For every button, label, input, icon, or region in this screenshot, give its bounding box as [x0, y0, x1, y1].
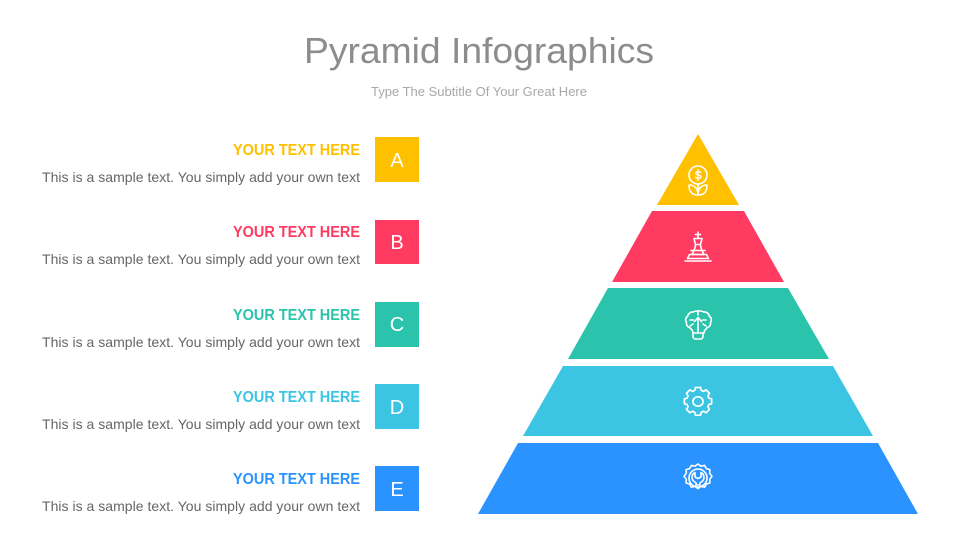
tier D: [523, 366, 873, 436]
tier C: [568, 288, 829, 359]
badge A: A: [390, 150, 404, 172]
item E: [42, 466, 419, 514]
icon: money flower: [689, 166, 707, 195]
pyramid: [478, 134, 918, 514]
heading D: YOUR TEXT HERE: [233, 389, 360, 406]
heading C: YOUR TEXT HERE: [233, 307, 360, 324]
text E: This is a sample text. You simply add your own text: [42, 498, 360, 514]
badge D: D: [390, 397, 404, 419]
badge B: [375, 220, 419, 264]
icon: chess king: [685, 232, 711, 261]
tier A: [657, 134, 739, 205]
text C: This is a sample text. You simply add your own text: [42, 334, 360, 350]
tier B: [612, 211, 784, 282]
item C: [42, 302, 419, 350]
subtitle: Type The Subtitle Of Your Great Here: [371, 84, 587, 99]
badge E: [375, 466, 419, 511]
heading B: YOUR TEXT HERE: [233, 224, 360, 241]
item A: [42, 137, 419, 185]
icon: gear with wrench: [684, 464, 712, 489]
text A: This is a sample text. You simply add your own text: [42, 169, 360, 185]
badge B: B: [390, 232, 404, 254]
badge A: [375, 137, 419, 182]
badge C: C: [390, 314, 404, 336]
badge C: [375, 302, 419, 347]
badge D: [375, 384, 419, 429]
heading A: YOUR TEXT HERE: [233, 142, 360, 159]
badge E: E: [390, 479, 404, 501]
tier E: [478, 443, 918, 514]
text B: This is a sample text. You simply add your own text: [42, 251, 360, 267]
icon: gear: [684, 387, 712, 415]
item D: [42, 384, 419, 432]
heading E: YOUR TEXT HERE: [233, 471, 360, 488]
title: Pyramid Infographics: [304, 30, 654, 71]
item B: [42, 220, 419, 267]
text D: This is a sample text. You simply add your own text: [42, 416, 360, 432]
icon: brain bulb: [686, 311, 711, 339]
